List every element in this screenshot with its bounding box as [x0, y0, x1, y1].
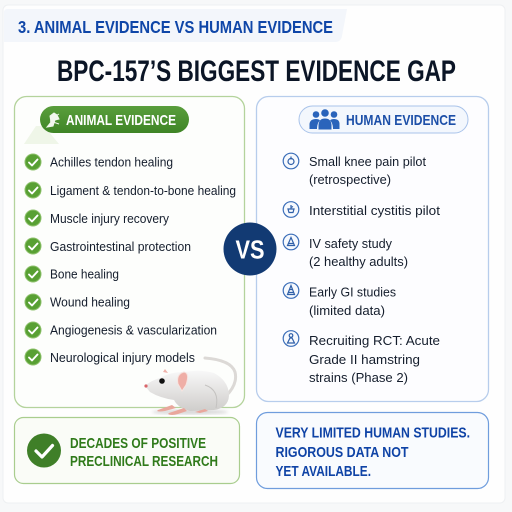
animal evidence list: Neurological injury models	[50, 350, 195, 365]
animal evidence list: Angiogenesis & vascularization	[50, 322, 217, 338]
human evidence list: Grade II hamstring	[309, 352, 420, 367]
animal evidence list	[25, 154, 236, 365]
callout: decades of positive preclinical research	[14, 418, 240, 484]
icon: people	[310, 109, 340, 130]
callout: very limited human studies: RIGOROUS DATA NOT	[276, 444, 408, 461]
feet	[157, 405, 176, 412]
animal evidence pill: ANIMAL EVIDENCE	[66, 112, 176, 129]
human evidence list: Early GI studies	[309, 284, 396, 300]
decorative mountain icon	[24, 126, 59, 144]
VS badge: VS	[236, 234, 264, 264]
human evidence list: Recruiting RCT: Acute	[309, 333, 440, 348]
icon: white lab rat	[144, 358, 236, 415]
animal evidence list: Wound healing	[50, 294, 130, 310]
animal evidence list: Muscle injury recovery	[50, 211, 169, 226]
animal evidence list: Achilles tendon healing	[50, 154, 173, 170]
human evidence list: (limited data)	[309, 303, 385, 318]
animal evidence list: Bone healing	[50, 266, 119, 282]
callout: decades of positive preclinical research: DECADES OF POSITIVE	[70, 435, 206, 452]
callout: very limited human studies: VERY LIMITED HUMAN STUDIES.	[276, 424, 470, 442]
icon: check badge	[27, 434, 61, 468]
VS badge	[224, 222, 276, 276]
human evidence list: (retrospective)	[309, 172, 391, 187]
human evidence list	[283, 153, 440, 385]
human evidence list: (2 healthy adults)	[309, 254, 408, 269]
human evidence list: Small knee pain pilot	[309, 154, 426, 169]
human evidence list: strains (Phase 2)	[309, 370, 408, 385]
human evidence list: IV safety study	[309, 236, 392, 251]
callout: very limited human studies: YET AVAILABLE.	[276, 463, 371, 480]
callout: decades of positive preclinical research: PRECLINICAL RESEARCH	[70, 453, 218, 470]
section heading: 3. ANIMAL EVIDENCE VS HUMAN EVIDENCE	[18, 17, 333, 37]
callout: very limited human studies	[256, 412, 488, 488]
header band	[4, 9, 347, 42]
human evidence list: Interstitial cystitis pilot	[309, 203, 440, 218]
human evidence pill: HUMAN EVIDENCE	[346, 112, 456, 129]
animal evidence pill	[40, 106, 189, 133]
human evidence pill	[299, 106, 468, 133]
animal evidence list: Gastrointestinal protection	[50, 239, 191, 254]
panel: animal evidence	[14, 96, 244, 408]
ear	[178, 372, 188, 391]
animal evidence list: Ligament & tendon-to-bone healing	[50, 183, 236, 198]
eye and nose	[159, 378, 165, 384]
panel: human evidence	[256, 96, 488, 402]
